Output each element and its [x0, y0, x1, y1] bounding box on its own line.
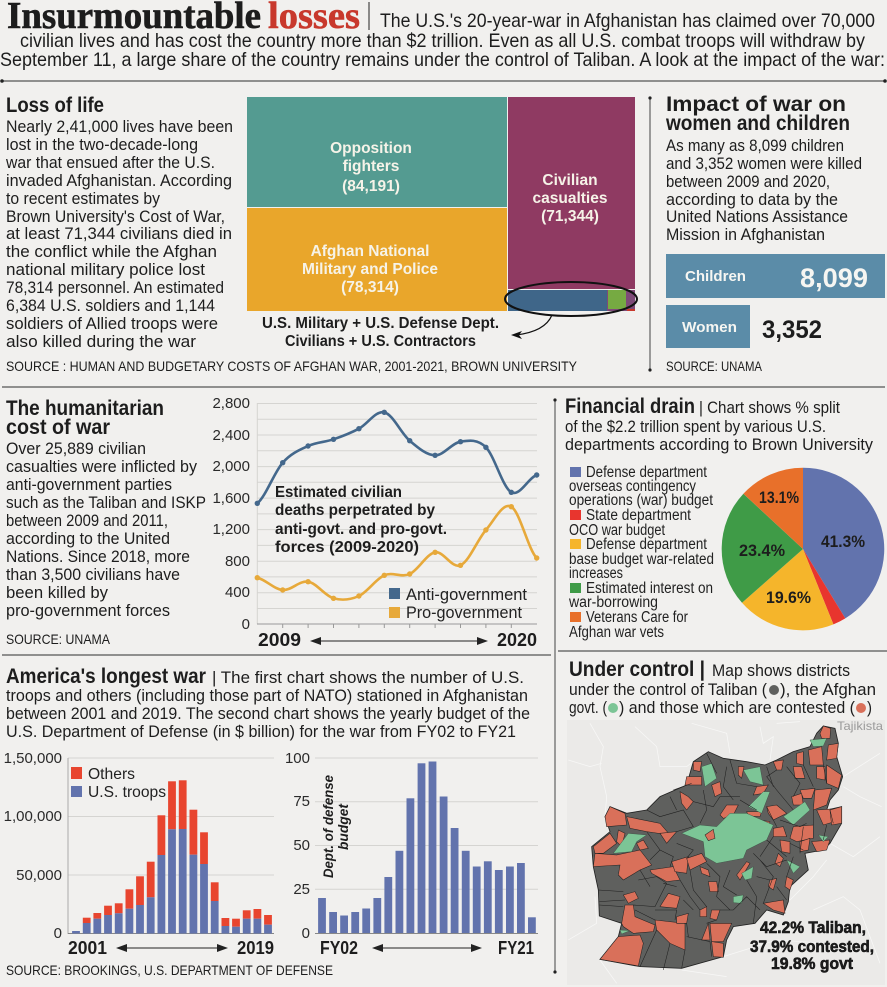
treemap cell: U.S. military and contractors: [508, 290, 635, 311]
pie legend: Defense department: [586, 464, 708, 481]
intro text: [0, 10, 885, 71]
heading and intro: longest war: U.S. Department of Defense (in $ billion) for the war from FY02 to FY21: [6, 723, 516, 741]
treemap cell: opposition fighters: Opposition: [330, 140, 412, 157]
text block: impact: [666, 137, 862, 244]
callout label: Civilians + U.S. Contractors: [285, 333, 476, 350]
text block: impact: Mission in Afghanistan: [666, 226, 825, 244]
y axis labels: 2,000: [212, 458, 250, 475]
heading and intro: under control: under the control of Taliban (: [569, 681, 767, 699]
pie chart: 19.6%: [766, 588, 811, 607]
chart annotation: forces (2009-2020): [275, 539, 419, 556]
chart annotation: deaths perpetrated by: [275, 502, 435, 519]
text block: loss of life: to recent estimates by: [6, 190, 161, 208]
text block: loss of life: Nearly 2,41,000 lives have been: [6, 118, 233, 136]
treemap chart: [247, 97, 637, 350]
y axis labels: 2,800: [212, 395, 250, 412]
district boundaries: [598, 753, 833, 970]
text block: loss of life: at least 71,344 civilians died in: [6, 225, 232, 243]
treemap cell: afghan military and police: Military and Police: [302, 261, 438, 278]
x axis labels and arrow: troops: 2001: [68, 938, 107, 958]
treemap cell: afghan military and police: [247, 208, 507, 311]
x axis labels and arrow: budget: FY21: [498, 938, 534, 958]
axis title: budget: Dept. of defense: [320, 775, 336, 878]
treemap cell: civilian casualties: (71,344): [541, 208, 599, 225]
pie legend: OCO war budget: [569, 522, 666, 539]
pie chart: [722, 468, 884, 630]
text block: humanitarian: according to the United: [6, 530, 170, 548]
text block: loss of life: national military police lost: [6, 261, 205, 279]
x axis labels and arrow: troops: 2019: [237, 938, 274, 958]
text block: humanitarian: Nations. Since 2018, more: [6, 548, 190, 566]
stat: children: Children: [685, 268, 746, 285]
pie legend: base budget war-related: [569, 551, 714, 568]
heading and intro: longest war: between 2001 and 2019. The second chart shows the yearly budget of the: [6, 705, 530, 723]
heading and intro: longest war: [6, 665, 530, 741]
y axis labels: budget: 100: [285, 750, 310, 767]
source: brookings: SOURCE: BROOKINGS, U.S. DEPARTMENT OF DEFENSE: [6, 962, 333, 978]
text block: humanitarian: casualties were inflicted by: [6, 458, 198, 476]
map: districts of Afghanistan: Tajikista: [837, 719, 883, 733]
y axis labels: troops: 0: [54, 925, 62, 942]
pie legend: overseas contingency: [569, 478, 696, 495]
legend: [389, 586, 527, 622]
chart annotation: [275, 484, 447, 556]
legend: Anti-government: [406, 586, 527, 604]
text block: loss of life: the conflict while the Afghan: [6, 243, 217, 261]
heading and intro: financial drain: | Chart shows % split: [699, 399, 840, 417]
y axis labels: budget: 50: [293, 837, 310, 854]
text block: humanitarian: pro-government forces: [6, 602, 170, 620]
y axis labels: 800: [225, 553, 250, 570]
text block: humanitarian: than 3,500 civilians have: [6, 566, 180, 584]
bar chart: defense budget: [285, 750, 538, 958]
map caption: 19.8% govt: [771, 954, 853, 973]
stat: women: [666, 305, 822, 348]
text block: humanitarian: between 2009 and 2011,: [6, 512, 168, 530]
y axis labels: troops: [4, 750, 62, 942]
bars: others: [83, 780, 272, 927]
y axis labels: troops: 1,00,000: [4, 808, 62, 825]
treemap cell: opposition fighters: fighters: [343, 158, 399, 175]
heading and intro: financial drain: of the $2.2 trillion spent by various U.S.: [565, 418, 826, 436]
text block: loss of life: invaded Afghanistan. According: [6, 172, 232, 190]
heading and intro: under control: Map shows districts: [712, 662, 850, 680]
y axis labels: 0: [242, 616, 250, 633]
heading and intro: financial drain: departments according to Brown University: [565, 436, 874, 454]
stat: women: 3,352: [762, 316, 822, 344]
pie chart: 23.4%: [739, 541, 785, 560]
text block: loss of life: soldiers of Allied troops were: [6, 315, 218, 333]
y axis labels: 400: [225, 584, 250, 601]
heading: impact of war: Impact of war on: [666, 93, 846, 116]
map caption: [750, 918, 874, 973]
heading and intro: under control: [569, 658, 876, 717]
pie legend: Estimated interest on: [586, 580, 713, 597]
treemap cell: afghan military and police: Afghan National: [311, 243, 429, 260]
y axis labels: 2,400: [212, 427, 250, 444]
chart annotation: anti-govt. and pro-govt.: [275, 521, 447, 538]
axis title: budget: budget: [335, 803, 351, 850]
panel: under control: [567, 658, 885, 985]
map caption: 37.9% contested,: [750, 937, 874, 956]
heading and intro: financial drain: [565, 395, 874, 454]
pie legend: Defense department: [586, 536, 708, 553]
heading and intro: under control: ), the Afghan: [780, 681, 876, 699]
stat: children: 8,099: [800, 263, 868, 293]
treemap cell: opposition fighters: [247, 97, 507, 207]
y axis labels: budget: [285, 750, 310, 942]
line: anti-government: [255, 410, 539, 506]
y axis labels: budget: 0: [302, 925, 310, 942]
y axis labels: budget: 75: [293, 793, 310, 810]
x axis labels and arrow: [258, 630, 537, 650]
legend: troops: U.S. troops: [88, 784, 166, 801]
text block: loss of life: war that ensued after the U.S.: [5, 154, 215, 172]
pie chart: 13.1%: [759, 488, 799, 507]
text block: impact: between 2009 and 2020,: [666, 173, 830, 191]
chart annotation: Estimated civilian: [275, 484, 402, 501]
heading: impact of war: [665, 93, 850, 135]
x axis labels and arrow: 2009: [258, 630, 301, 650]
heading and intro: under control: Under control |: [569, 658, 705, 681]
heading: humanitarian cost: cost of war: [6, 416, 110, 439]
x axis labels and arrow: budget: FY02: [320, 938, 358, 958]
stacked bar chart: troops: [4, 750, 274, 958]
panel: America's longest war: [4, 665, 538, 978]
source: unama: SOURCE: UNAMA: [6, 631, 111, 647]
heading and intro: longest war: troops and others (including those part of NATO) stationed in Afghanistan: [6, 687, 528, 705]
y axis labels: [212, 395, 250, 633]
y axis labels: troops: 50,000: [16, 867, 62, 884]
text block: humanitarian: Over 25,889 civilian: [6, 440, 146, 458]
panel: impact on women and children: [665, 93, 885, 374]
heading: humanitarian cost: The humanitarian: [6, 397, 164, 420]
text block: impact: according to data by the: [666, 191, 838, 209]
callout ellipse and arrow: [505, 282, 637, 339]
heading and intro: under control: ): [867, 699, 872, 717]
text block: loss of life: [5, 118, 233, 351]
treemap cell: civilian casualties: Civilian: [542, 172, 598, 189]
legend: Pro-government: [406, 604, 522, 622]
line: pro-government: [255, 504, 539, 601]
bars: U.S. troops: [72, 829, 272, 934]
y axis labels: troops: 1,50,000: [4, 750, 62, 767]
text block: humanitarian: anti-government parties: [6, 476, 172, 494]
y axis labels: 1,200: [212, 521, 250, 538]
pie legend: State department: [586, 507, 692, 524]
text block: loss of life: 78,314 personnel. An estimated: [6, 279, 224, 297]
map: districts of Afghanistan: [567, 719, 885, 985]
heading and intro: financial drain: Financial drain: [565, 395, 695, 418]
x axis labels and arrow: 2020: [497, 630, 537, 650]
line chart: civilian deaths: [212, 395, 539, 650]
text block: loss of life: Brown University's Cost of War,: [6, 208, 225, 226]
panel: humanitarian cost: [6, 395, 539, 650]
panel: financial drain: [565, 395, 884, 641]
panel: loss of life: [5, 94, 637, 374]
treemap cell: civilian casualties: [508, 97, 635, 289]
y axis labels: 1,600: [212, 490, 250, 507]
heading and intro: longest war: America's longest war: [6, 665, 206, 688]
pie legend: increases: [569, 565, 623, 582]
legend: troops: [71, 766, 166, 801]
callout label: [262, 315, 499, 350]
text block: humanitarian: such as the Taliban and ISKP: [6, 494, 206, 512]
source: brown university: SOURCE : HUMAN AND BUDGETARY COSTS OF AFGHAN WAR, 2001-2021, BROWN UNIVERSITY: [6, 358, 578, 374]
legend: troops: Others: [88, 766, 135, 783]
map base: Taliban-held territory: [592, 726, 843, 968]
heading: loss of life: Loss of life: [6, 94, 104, 117]
map layer: government districts: [613, 738, 828, 934]
axis title: budget: [320, 775, 351, 878]
text block: impact: As many as 8,099 children: [666, 137, 844, 155]
x axis labels and arrow: troops: [68, 938, 274, 958]
treemap cell: civilian casualties: casualties: [533, 190, 607, 207]
heading and intro: longest war: | The first chart shows the number of U.S.: [212, 669, 524, 687]
heading and intro: under control: ) and those which are contested (: [619, 699, 855, 717]
text block: loss of life: also killed during the war: [6, 333, 197, 351]
text block: humanitarian: been killed by: [6, 584, 109, 602]
treemap cell: afghan military and police: (78,314): [341, 279, 399, 296]
treemap cell: opposition fighters: (84,191): [342, 178, 400, 195]
bars: budget: [318, 762, 536, 933]
pie legend: Veterans Care for: [586, 609, 688, 626]
heading: humanitarian cost: [6, 397, 164, 439]
callout label: U.S. Military + U.S. Defense Dept.: [262, 315, 499, 332]
pie legend: war-borrowing: [568, 594, 658, 611]
heading and intro: under control: govt. (: [569, 699, 607, 717]
map layer: contested districts: [593, 726, 842, 966]
x axis labels and arrow: budget: [320, 938, 534, 958]
pie legend: [568, 464, 714, 641]
pie legend: Afghan war vets: [569, 624, 664, 641]
text block: loss of life: lost in the two-decade-long: [6, 136, 198, 154]
pie legend: operations (war) budget: [569, 492, 714, 509]
text block: impact: United Nations Assistance: [666, 208, 848, 226]
text block: humanitarian: [6, 440, 206, 620]
y axis labels: budget: 25: [293, 881, 310, 898]
text block: loss of life: 6,384 U.S. soldiers and 1,144: [6, 297, 215, 315]
text block: impact: and 3,352 women were killed: [666, 155, 862, 173]
pie chart: 41.3%: [821, 532, 865, 551]
stat: women: Women: [682, 319, 737, 336]
heading: impact of war: women and children: [665, 112, 850, 135]
stat: children: [666, 254, 885, 298]
map caption: 42.2% Taliban,: [760, 918, 866, 937]
source: unama: SOURCE: UNAMA: [666, 358, 763, 374]
